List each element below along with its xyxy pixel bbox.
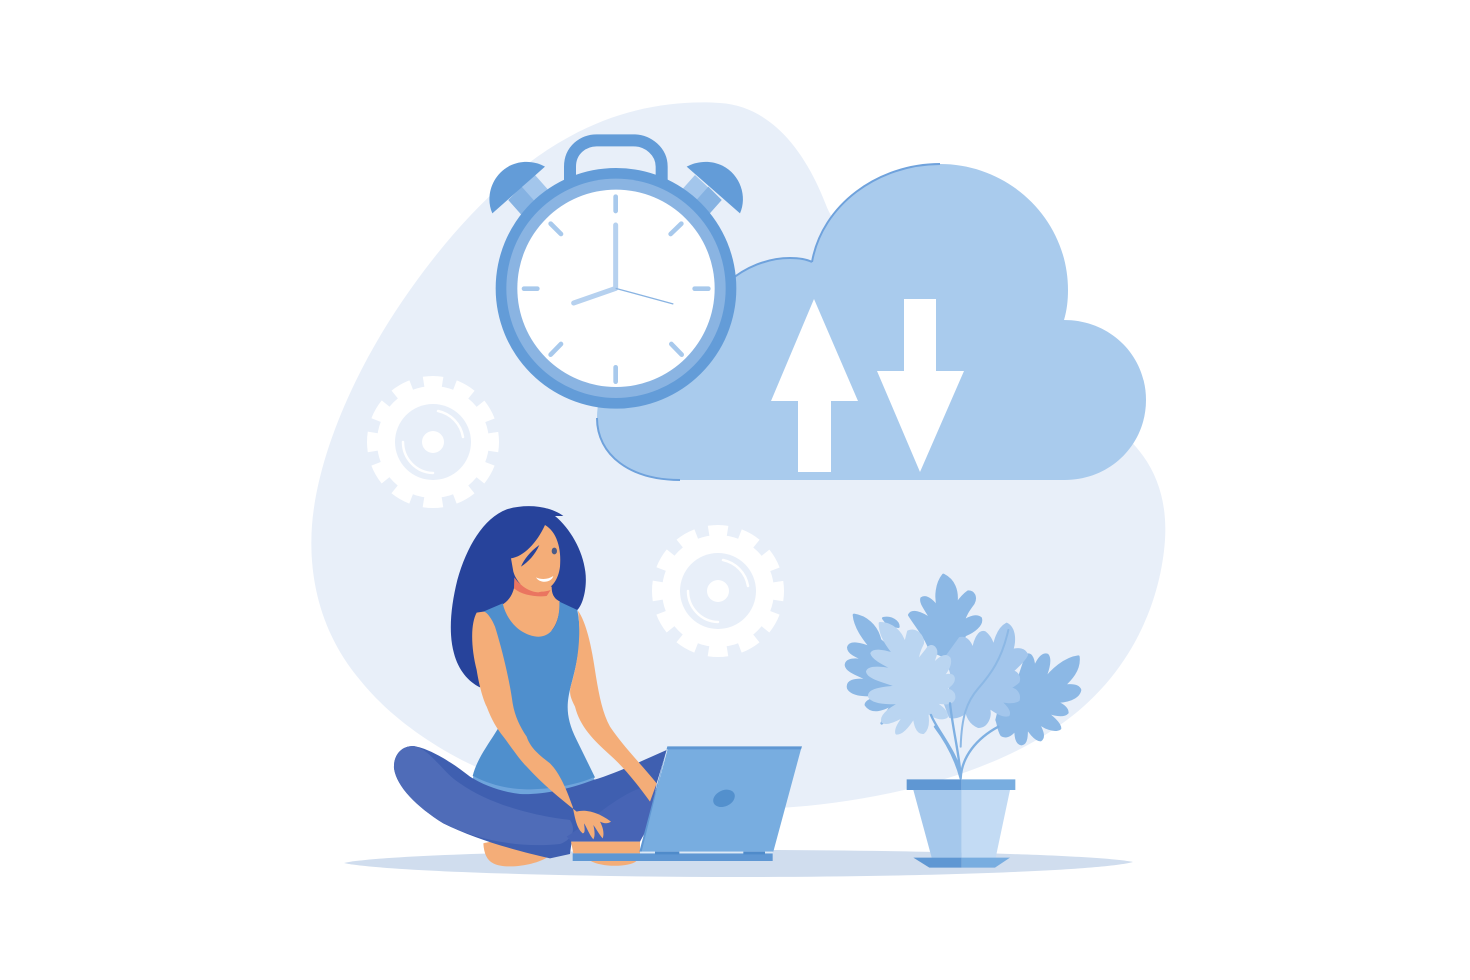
saucer right	[962, 858, 1010, 868]
laptop hinge	[640, 852, 773, 853]
clock face	[517, 190, 715, 387]
laptop screen	[640, 747, 802, 852]
clock hands	[574, 225, 616, 303]
laptop top edge	[639, 746, 802, 852]
gear: left	[374, 383, 492, 501]
hour ticks	[524, 197, 708, 382]
hair	[451, 506, 586, 687]
pot left side	[913, 790, 962, 858]
saucer left	[913, 858, 962, 868]
pot right side	[962, 790, 1010, 858]
handle	[570, 140, 662, 180]
dress	[473, 602, 595, 794]
alarm clock	[489, 140, 743, 409]
leaf: left front	[867, 623, 954, 733]
stems	[931, 703, 998, 778]
pot rim right	[962, 779, 1015, 790]
face	[511, 525, 560, 592]
leaf: left back	[846, 615, 913, 723]
arm: right	[570, 611, 657, 802]
cloud	[597, 164, 1146, 480]
smile	[536, 576, 553, 582]
neck shadow	[514, 577, 551, 596]
arrow: down	[877, 299, 964, 472]
pot rim	[907, 779, 962, 790]
woman with laptop	[394, 506, 802, 866]
foot: right	[571, 842, 640, 866]
ground shadow	[344, 850, 1133, 877]
gear: right	[659, 532, 777, 650]
fringe strand	[521, 545, 539, 567]
left knee highlight	[394, 746, 573, 845]
leaf: middle	[945, 624, 1027, 727]
laptop base	[573, 853, 773, 861]
arm: left with hand	[472, 612, 611, 839]
foot: left	[483, 841, 548, 866]
waistband	[473, 776, 596, 795]
eye	[552, 548, 557, 554]
leaf: right	[997, 655, 1080, 744]
laptop feet	[655, 852, 765, 854]
right bell	[682, 162, 743, 215]
cloud edge lines	[597, 164, 940, 480]
neck	[502, 583, 560, 637]
clock outer ring	[496, 168, 736, 409]
leaf vein	[961, 630, 1008, 747]
legs	[394, 746, 667, 858]
laptop logo	[710, 786, 738, 810]
clock inner ring	[506, 179, 726, 398]
potted plant	[846, 575, 1080, 868]
left bell	[489, 162, 548, 215]
right knee highlight	[567, 783, 657, 842]
leaf: top	[909, 575, 981, 672]
background blob	[311, 102, 1165, 810]
arrow: up	[771, 299, 858, 472]
second hand	[616, 288, 673, 304]
